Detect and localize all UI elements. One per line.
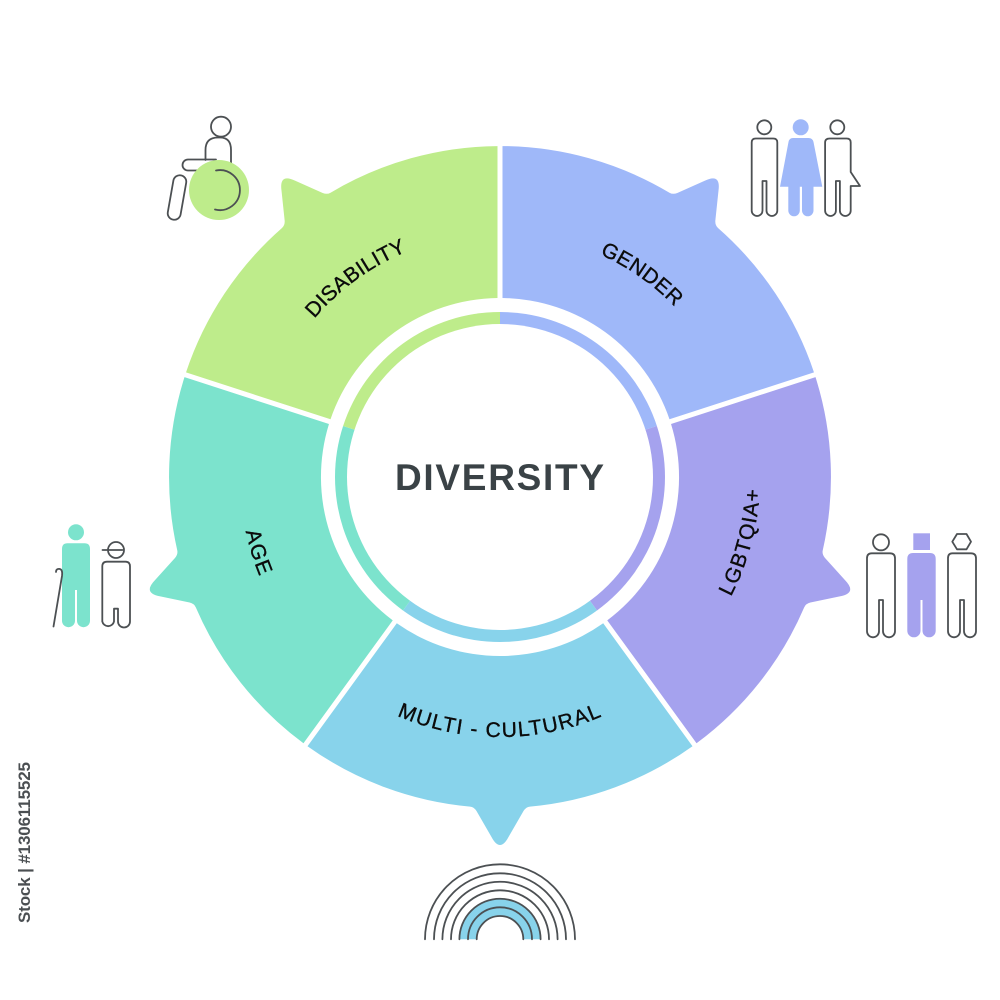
label: gender: GENDER <box>602 244 682 306</box>
label: disability: DISABILITY <box>304 238 402 318</box>
label: lgbtqia+: LGBTQIA+ <box>718 490 759 596</box>
label: age: AGE <box>245 531 273 576</box>
icon: rainbow <box>425 864 575 939</box>
icon: age figures <box>54 524 130 628</box>
title: DIVERSITY <box>395 457 604 498</box>
icon: wheelchair user <box>167 117 249 221</box>
icon: lgbtqia+ figures <box>867 533 976 637</box>
diversity wheel <box>52 119 949 886</box>
label: multi-cultural: MULTI - CULTURAL <box>398 702 602 738</box>
icon: gender figures <box>752 119 860 216</box>
inner ring <box>335 312 665 642</box>
segment: lgbtqia+ <box>580 339 909 774</box>
segment: age <box>91 339 420 774</box>
segment: gender <box>430 66 872 472</box>
segment: multi-cultural <box>308 623 692 845</box>
stock id text: Stock | #1306115525 <box>15 762 34 923</box>
segment: disability <box>128 66 570 472</box>
